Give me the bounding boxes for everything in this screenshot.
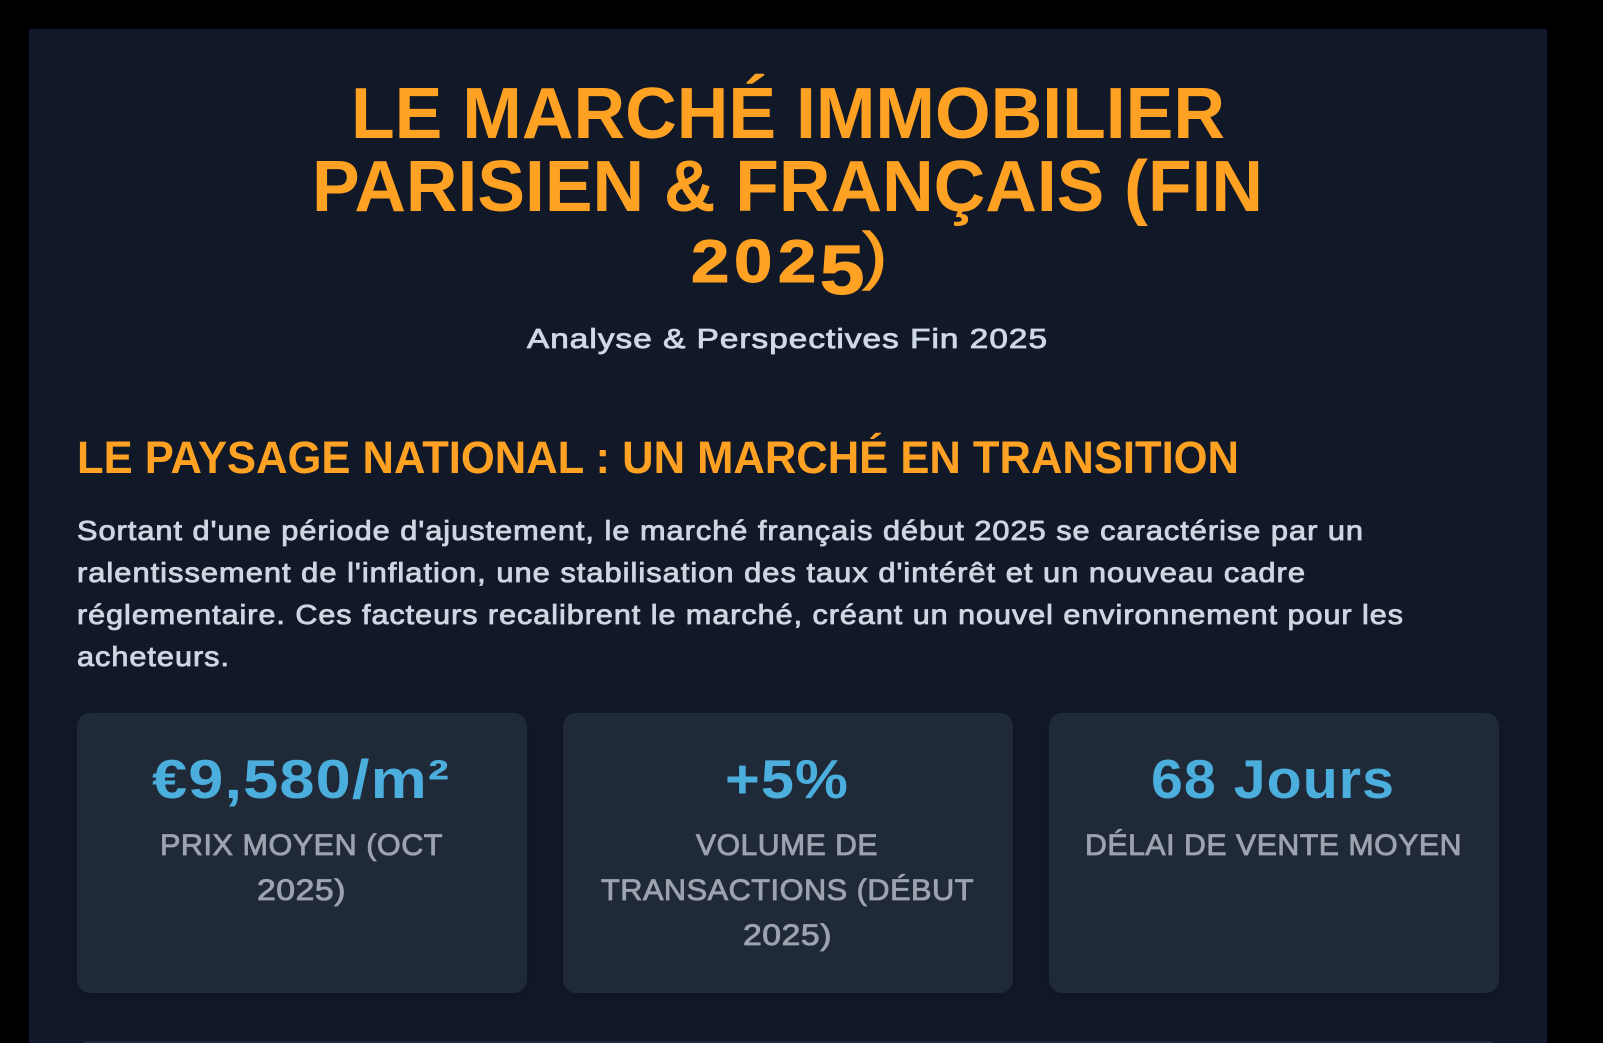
stat value: volume: +5%	[725, 748, 849, 810]
text block: introduction: acheteurs.	[77, 641, 230, 672]
stat label: price: PRIX MOYEN (OCT	[160, 829, 443, 862]
stat label: delay: DÉLAI DE VENTE MOYEN	[1085, 829, 1462, 862]
subtitle: Analyse & Perspectives Fin 2025	[527, 323, 1048, 354]
title	[312, 74, 1263, 309]
panel: stat card average price	[77, 713, 527, 993]
title: 0	[734, 227, 772, 295]
title: PARISIEN & FRANÇAIS (FIN	[312, 147, 1263, 227]
stat label: volume	[601, 829, 974, 952]
stat label: price	[160, 829, 443, 907]
text block: introduction: réglementaire. Ces facteurs recalibrent le marché, créant un nouvel environnement pour les	[77, 599, 1404, 630]
stat label: volume: 2025)	[743, 919, 832, 952]
stat label: volume: TRANSACTIONS (DÉBUT	[601, 874, 974, 907]
text block: introduction	[77, 515, 1404, 672]
stat value: price: €9,580/m²	[152, 748, 450, 810]
panel: stat card sale delay	[1049, 713, 1499, 993]
panel: stat card transactions	[563, 713, 1013, 993]
stat label: volume: VOLUME DE	[696, 829, 878, 862]
title: 2	[691, 227, 729, 295]
title: )	[863, 221, 887, 291]
title: 5	[820, 231, 865, 309]
title: LE MARCHÉ IMMOBILIER	[351, 74, 1225, 154]
text block: introduction: ralentissement de l'inflation, une stabilisation des taux d'intérêt et un nouveau cadre	[77, 557, 1306, 588]
heading: national landscape: LE PAYSAGE NATIONAL : UN MARCHÉ EN TRANSITION	[77, 432, 1239, 483]
text block: introduction: Sortant d'une période d'ajustement, le marché français début 2025 se caractérise par un	[77, 515, 1364, 546]
stat value: delay: 68 Jours	[1151, 748, 1395, 810]
stat label: price: 2025)	[257, 874, 346, 907]
title: 2	[778, 227, 816, 295]
